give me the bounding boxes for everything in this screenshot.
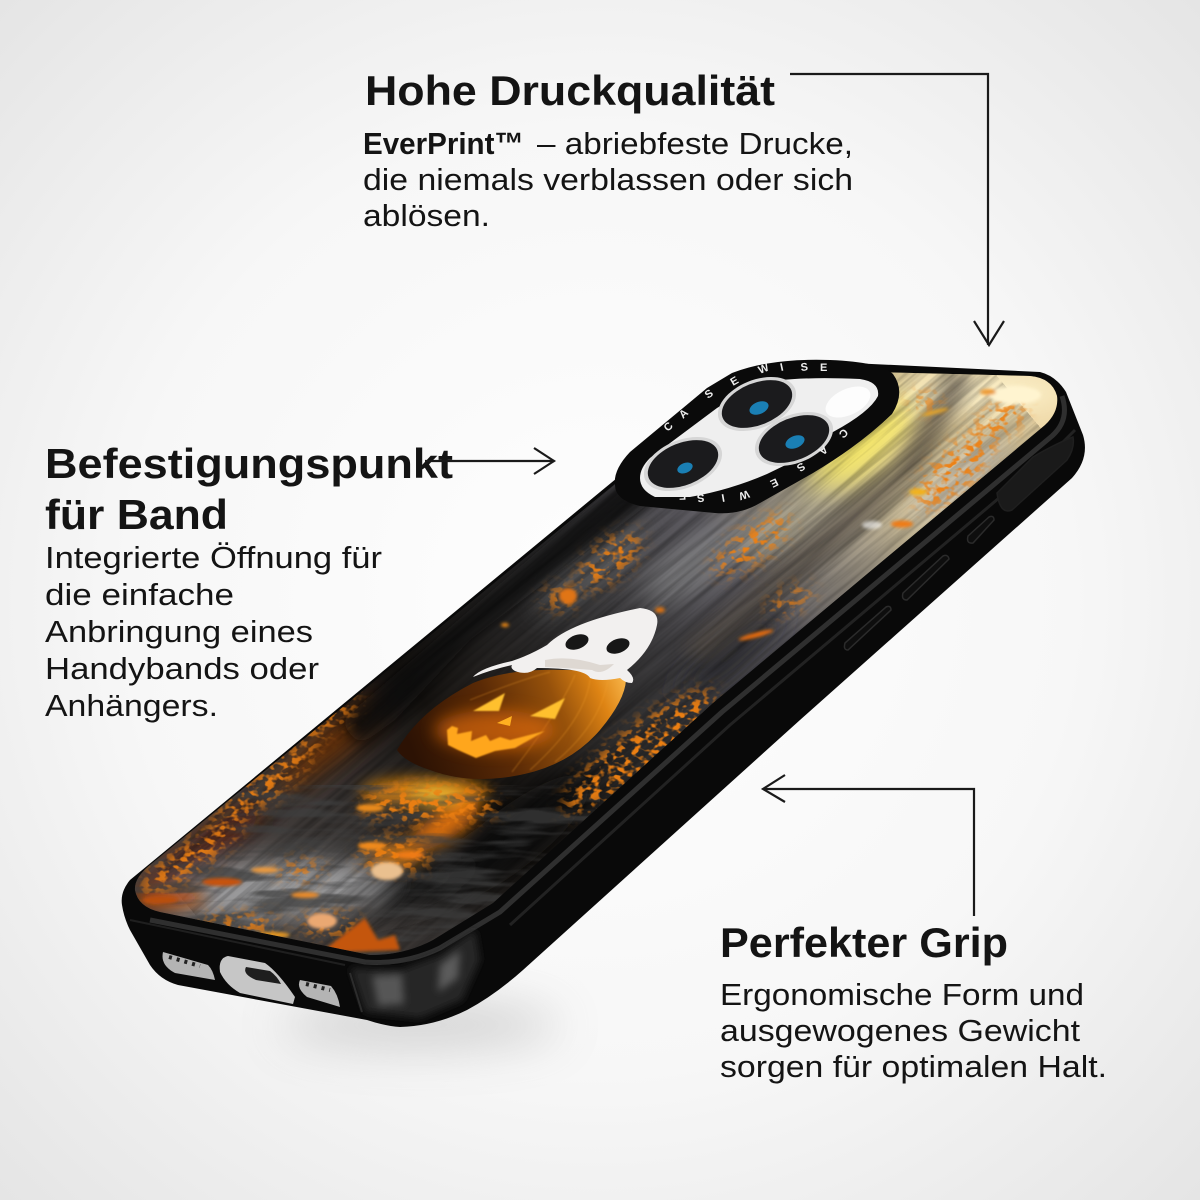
left speaker holes	[169, 957, 200, 966]
left eye	[473, 693, 505, 711]
bottom lip	[130, 920, 345, 965]
action button	[968, 516, 994, 543]
text block: ablösen.	[363, 198, 490, 233]
flash	[821, 380, 875, 424]
ghost shading	[545, 658, 614, 672]
text block: Handybands oder	[45, 651, 319, 686]
text block	[363, 126, 853, 233]
pumpkin	[397, 670, 626, 779]
brush texture	[156, 372, 1041, 952]
heading: Befestigungspunkt	[45, 440, 453, 487]
text block: Anbringung eines	[45, 614, 313, 649]
case body	[122, 362, 1085, 1027]
dark left streak	[340, 476, 660, 745]
side rim highlight	[150, 396, 1075, 1018]
text block: ausgewogenes Gewicht	[720, 1013, 1080, 1048]
accent leaves	[142, 386, 1041, 953]
phone shadow	[280, 1003, 560, 1047]
text block: Integrierte Öffnung für	[45, 540, 382, 575]
left lens	[636, 426, 730, 502]
side buttons	[844, 437, 1073, 650]
phone case	[122, 360, 1085, 1027]
text block: die niemals verblassen oder sich	[363, 162, 853, 197]
text block	[45, 540, 382, 723]
heading: Hohe Druckqualität	[365, 67, 775, 114]
text block	[720, 977, 1107, 1084]
reflection on water	[136, 780, 487, 906]
arrow: strap attachment	[425, 448, 554, 474]
ghost body	[473, 608, 657, 683]
ring lettering top: CASEWISE	[662, 361, 827, 434]
top lens	[710, 366, 804, 442]
face glow	[435, 710, 555, 750]
nose	[497, 716, 512, 726]
charging ports	[162, 952, 340, 1007]
pumpkin body	[397, 670, 626, 779]
ring lettering bottom: CASEWISE	[679, 426, 850, 504]
volume button upper	[902, 555, 949, 600]
arrow: print quality	[790, 74, 1004, 345]
text block: sorgen für optimalen Halt.	[720, 1049, 1107, 1084]
text block: EverPrint™	[363, 126, 524, 161]
autumn leaf speckle	[138, 384, 1036, 944]
side aperture	[997, 437, 1073, 511]
text block: Ergonomische Form und	[720, 977, 1084, 1012]
heading: Perfekter Grip	[720, 919, 1008, 966]
right lens	[747, 401, 841, 477]
printed artwork	[134, 372, 1058, 955]
usb port	[220, 956, 295, 1004]
bottom corner reflection	[350, 930, 480, 1018]
camera window	[640, 378, 878, 497]
callout: Hohe Druckqualität	[363, 67, 853, 233]
right eye	[530, 698, 565, 719]
text block: – abriebfeste Drucke,	[537, 126, 853, 161]
water ripples	[130, 785, 600, 960]
tree trunk	[680, 372, 975, 660]
callout: Befestigungspunkt für Band	[45, 440, 453, 723]
wood grain	[470, 672, 608, 772]
usb opening	[245, 967, 281, 984]
left speaker	[162, 952, 215, 980]
right eye	[606, 638, 630, 654]
right speaker	[299, 980, 340, 1007]
ring body	[615, 360, 899, 513]
text block: die einfache	[45, 577, 234, 612]
volume button lower	[844, 606, 891, 650]
heading	[45, 440, 453, 538]
heading: für Band	[45, 491, 228, 538]
mouth	[447, 726, 545, 758]
callout: Perfekter Grip	[720, 919, 1107, 1084]
camera ring	[615, 360, 899, 513]
painted light and shadow masses	[123, 372, 1070, 929]
ghost	[473, 608, 657, 683]
text block: Anhängers.	[45, 688, 218, 723]
left eye	[566, 634, 588, 650]
right speaker holes	[306, 984, 330, 990]
arrow: grip	[763, 775, 974, 916]
